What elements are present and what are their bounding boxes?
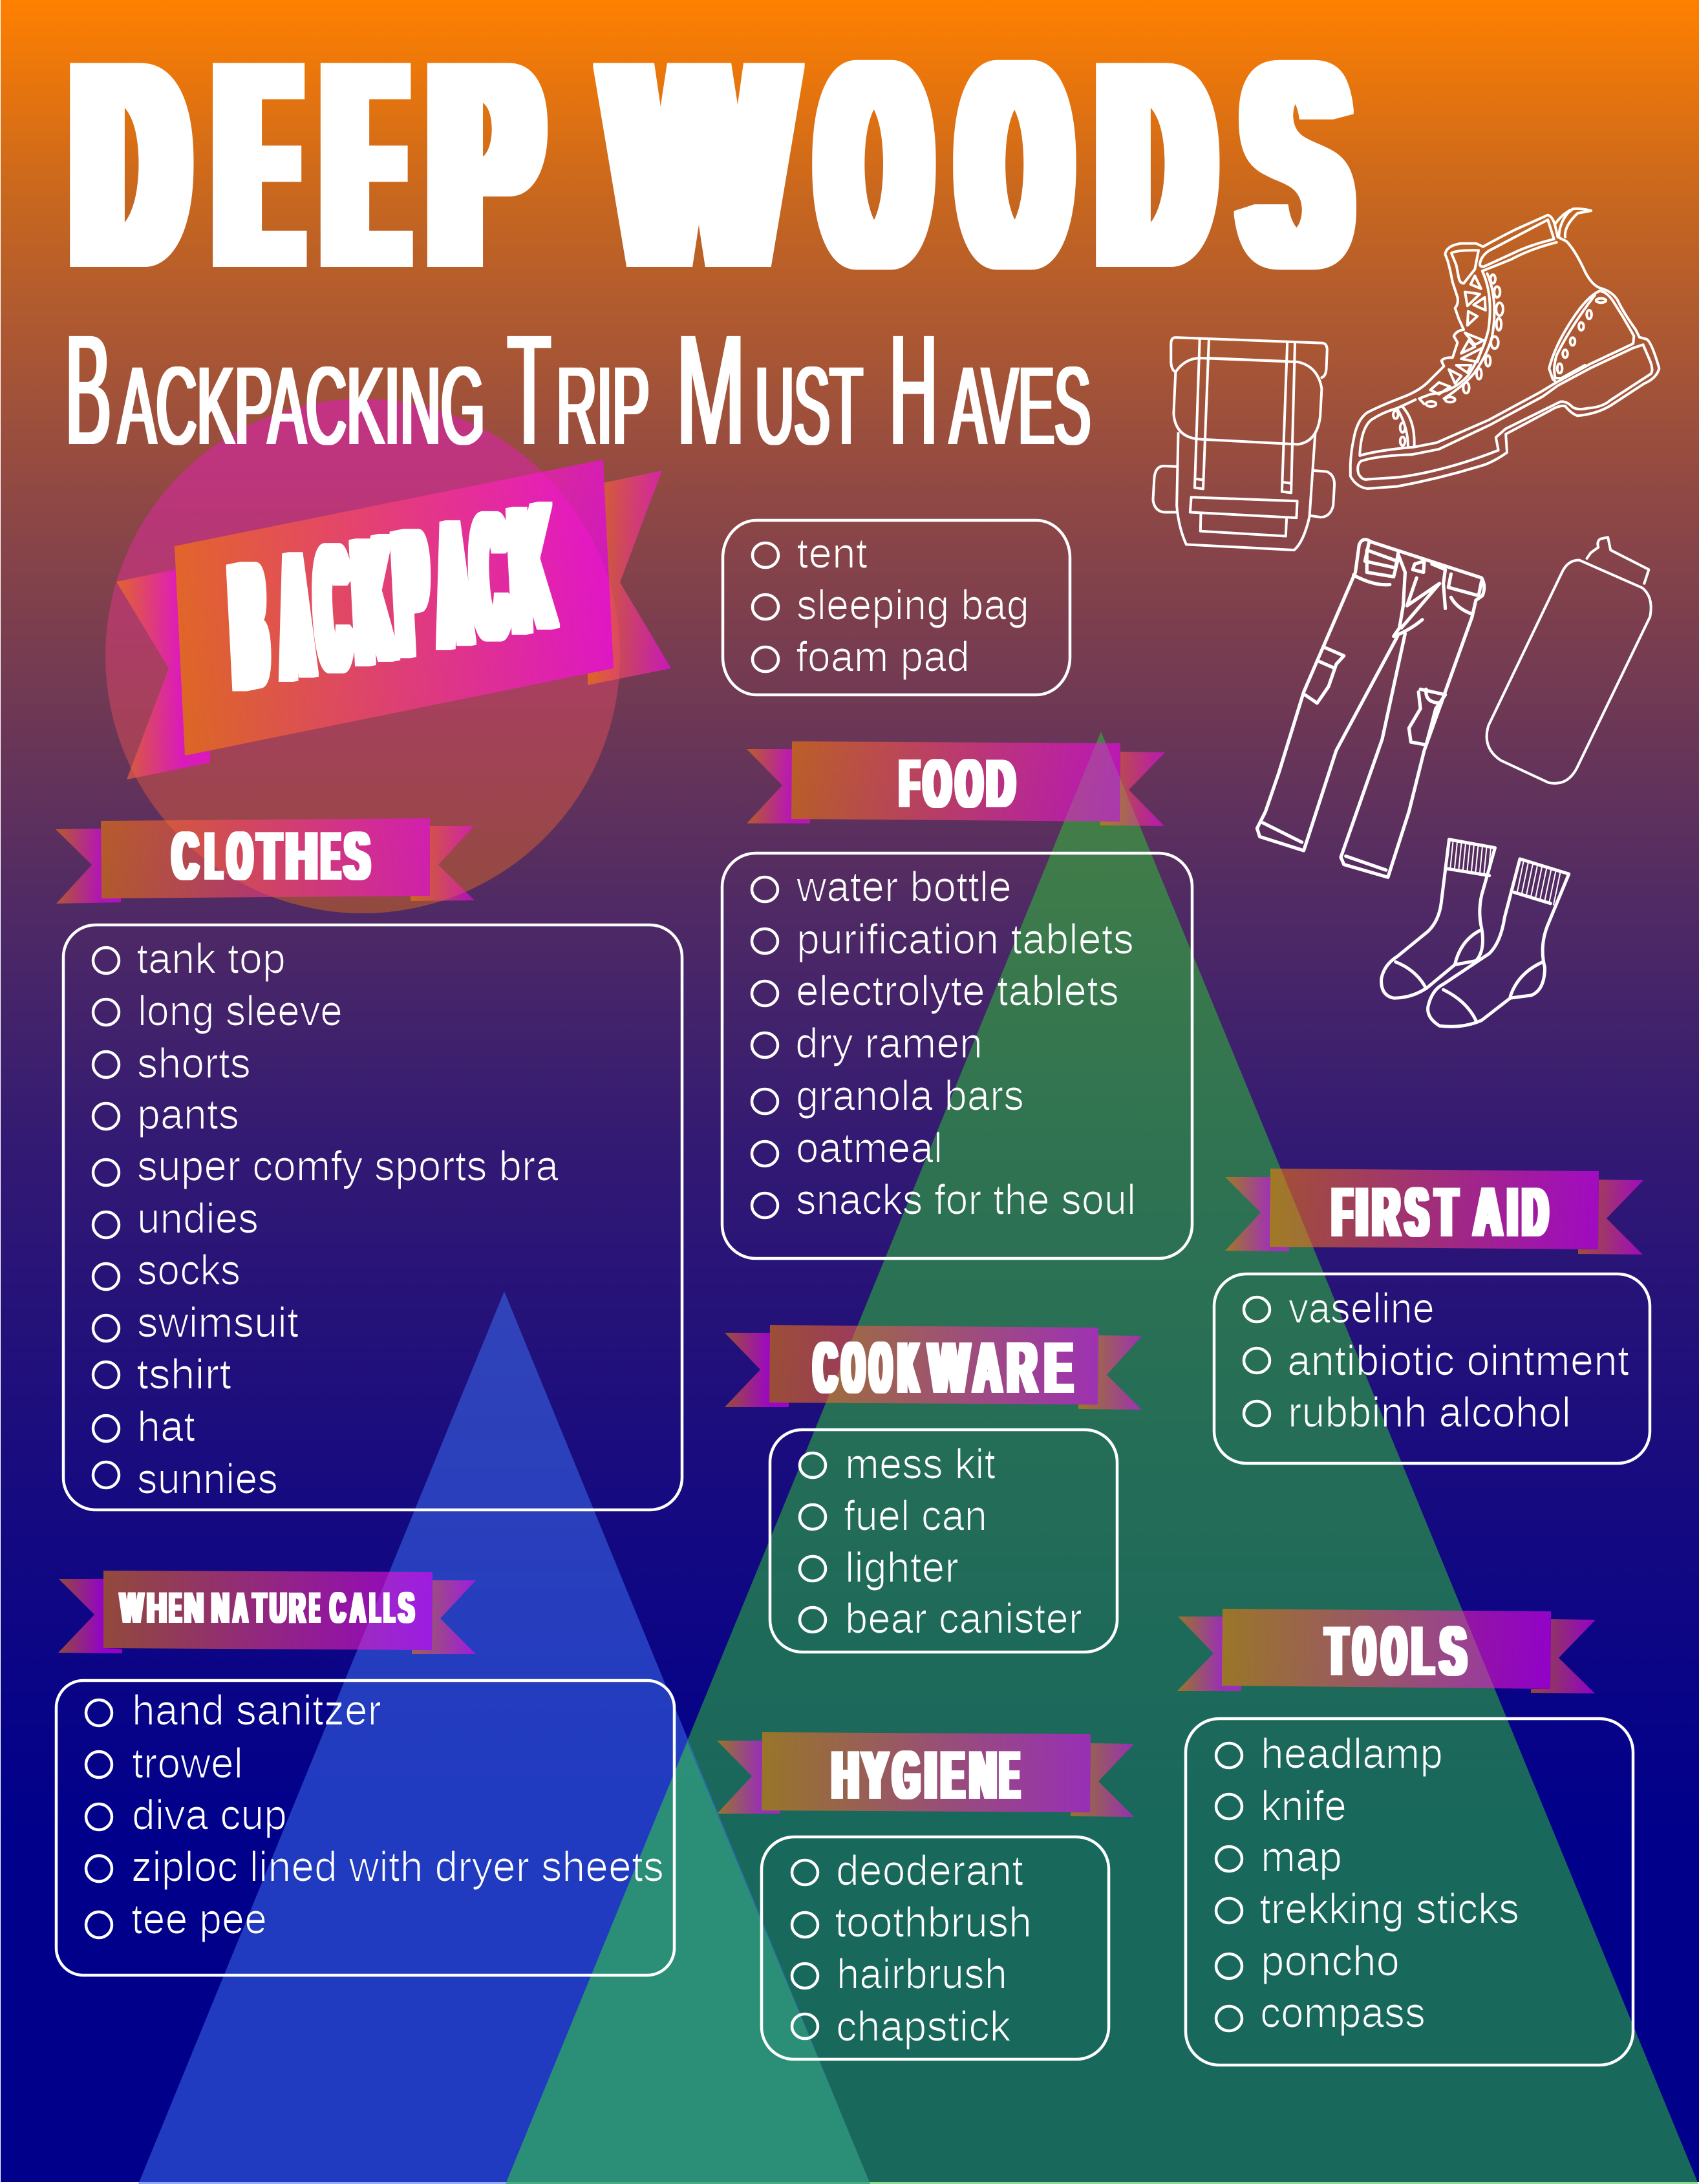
bullets	[800, 1453, 826, 1632]
ribbon: backpack	[116, 460, 671, 779]
ribbon label: backpack: A	[277, 513, 315, 718]
items: electrolyte tablets	[796, 968, 1119, 1014]
list box	[722, 853, 1192, 1258]
ribbon: clothes: T	[258, 819, 281, 894]
ribbon: clothes: E	[322, 819, 339, 894]
bullets	[1244, 1297, 1270, 1426]
subtitle: M	[676, 302, 745, 478]
ribbon: cookware: C	[814, 1328, 837, 1408]
items: toothbrush	[835, 1899, 1032, 1945]
items: oatmeal	[796, 1125, 943, 1171]
ribbon: food: D	[987, 747, 1015, 822]
items: pants	[137, 1091, 239, 1138]
main title: E	[222, 3, 294, 327]
ribbon: cookware: O	[870, 1328, 892, 1408]
ribbon: when nature calls: H	[147, 1584, 167, 1631]
items: trowel	[132, 1740, 243, 1786]
ribbon: food: O	[924, 747, 951, 822]
ribbon: when nature calls: W	[120, 1584, 144, 1631]
ribbon: when nature calls: A	[350, 1584, 365, 1631]
ribbon: first aid	[1225, 1169, 1643, 1255]
ribbon: clothes: C	[173, 819, 198, 894]
ribbon: clothes: S	[345, 819, 370, 894]
items: deoderant	[836, 1847, 1023, 1894]
items: chapstick	[836, 2003, 1011, 2050]
ribbon label: backpack	[228, 465, 555, 728]
items: sleeping bag	[796, 582, 1029, 628]
subtitle	[65, 302, 1091, 478]
green triangle	[506, 732, 1698, 2184]
items: tent	[796, 530, 868, 577]
ribbon: tools: L	[1412, 1612, 1433, 1690]
ribbon: clothes: O	[228, 819, 252, 894]
ribbon: when nature calls: E	[310, 1584, 319, 1631]
ribbon: tools	[1177, 1609, 1596, 1693]
list box	[63, 925, 682, 1510]
ribbon: tools: S	[1440, 1612, 1466, 1690]
subtitle: T	[508, 302, 551, 478]
list box	[723, 520, 1070, 695]
items: diva cup	[132, 1792, 287, 1838]
items: granola bars	[796, 1072, 1024, 1119]
items: rubbinh alcohol	[1288, 1389, 1571, 1436]
ribbon: when nature calls: C	[330, 1584, 345, 1631]
items: ziploc lined with dryer sheets	[131, 1843, 664, 1890]
ribbon: food: O	[956, 747, 982, 822]
subtitle: B	[65, 302, 111, 478]
items: headlamp	[1261, 1730, 1443, 1777]
items: knife	[1261, 1783, 1347, 1829]
panel: when nature calls	[56, 1571, 674, 1975]
ribbon: first aid: T	[1436, 1173, 1457, 1251]
items: poncho	[1261, 1938, 1400, 1984]
items	[835, 1847, 1032, 2050]
panel: food	[722, 741, 1192, 1258]
items: trekking sticks	[1259, 1885, 1519, 1932]
items: lighter	[845, 1544, 959, 1591]
items: fuel can	[844, 1492, 987, 1539]
ribbon label: backpack: K	[350, 496, 396, 703]
main title: W	[610, 3, 790, 327]
items: socks	[137, 1247, 240, 1293]
ribbon: cookware	[725, 1325, 1142, 1410]
ribbon: when nature calls: N	[184, 1584, 204, 1631]
panel: cookware	[725, 1325, 1142, 1652]
list box	[770, 1430, 1117, 1652]
main title: O	[965, 3, 1065, 327]
icon: backpack	[1153, 337, 1334, 550]
bullets	[792, 1860, 818, 2039]
ribbon: when nature calls	[58, 1571, 476, 1654]
ribbon: food: F	[900, 747, 919, 822]
main title: E	[330, 3, 400, 327]
items	[796, 530, 1029, 680]
bullets	[1216, 1743, 1242, 2031]
ribbon label: backpack: P	[392, 489, 431, 695]
ribbon: hygiene: N	[970, 1738, 996, 1813]
ribbon: cookware: W	[929, 1328, 969, 1408]
items: mess kit	[845, 1441, 996, 1487]
ribbon: clothes: H	[286, 819, 317, 894]
main title: D	[77, 3, 183, 327]
ribbon: hygiene: E	[1000, 1738, 1019, 1813]
icon: boot	[1351, 209, 1659, 489]
icon: socks	[1382, 840, 1569, 1026]
subtitle: ACKPACKING	[118, 344, 485, 468]
items	[795, 864, 1136, 1223]
ribbon: first aid: R	[1373, 1173, 1400, 1251]
items: swimsuit	[137, 1299, 299, 1346]
items: foam pad	[796, 633, 970, 680]
panel: tools	[1177, 1609, 1633, 2065]
ribbon: cookware: A	[974, 1328, 1001, 1408]
ribbon: first aid: D	[1523, 1173, 1548, 1251]
items: snacks for the soul	[796, 1176, 1136, 1223]
subtitle: UST	[755, 344, 862, 468]
subtitle: RIP	[557, 344, 648, 468]
items: hairbrush	[837, 1951, 1007, 1997]
ribbon: clothes	[56, 818, 475, 904]
subtitle: H	[890, 302, 937, 478]
items: undies	[137, 1195, 259, 1242]
ribbon: tools: T	[1326, 1612, 1347, 1690]
ribbon: when nature calls: S	[399, 1584, 414, 1631]
ribbon: tools: O	[1354, 1612, 1375, 1690]
list box	[762, 1837, 1109, 2059]
ribbon label: backpack: B	[228, 522, 270, 728]
ribbon: when nature calls: A	[233, 1584, 248, 1631]
bullets	[86, 1700, 112, 1938]
panel: first aid	[1214, 1169, 1650, 1463]
ribbon: hygiene: G	[893, 1738, 919, 1813]
items: hand sanitzer	[132, 1687, 381, 1733]
main title: D	[1103, 3, 1209, 327]
ribbon: hygiene: H	[832, 1738, 859, 1813]
ribbon label: backpack: C	[469, 473, 512, 679]
items	[1287, 1285, 1629, 1436]
ribbon: when nature calls: L	[370, 1584, 380, 1631]
ribbon label: backpack: A	[434, 481, 473, 686]
ribbon: first aid: I	[1508, 1173, 1517, 1251]
ribbon: when nature calls: T	[253, 1584, 266, 1631]
items: antibiotic ointment	[1287, 1337, 1629, 1384]
ribbon: first aid: A	[1474, 1173, 1502, 1251]
main title: O	[824, 3, 924, 327]
list box	[1214, 1274, 1650, 1463]
text: AVES	[950, 344, 1091, 468]
ribbon: when nature calls: E	[169, 1584, 181, 1631]
items: vaseline	[1288, 1285, 1435, 1331]
green triangle overlap	[506, 1742, 870, 2184]
items	[136, 935, 559, 1502]
ribbon: clothes: L	[206, 819, 221, 894]
ribbon: first aid: F	[1332, 1173, 1352, 1251]
items: tank top	[136, 935, 286, 982]
bullets	[753, 543, 778, 672]
ribbon: cookware: K	[899, 1328, 918, 1408]
ribbon: when nature calls: N	[211, 1584, 229, 1631]
bullets	[93, 948, 119, 1488]
items: long sleeve	[138, 988, 343, 1034]
items: map	[1261, 1834, 1342, 1880]
ribbon: cookware: R	[1007, 1328, 1037, 1408]
blue triangle	[138, 1291, 870, 2184]
ribbon: when nature calls: L	[384, 1584, 394, 1631]
ribbon: hygiene	[717, 1732, 1134, 1817]
panel: hygiene	[717, 1732, 1134, 2059]
ribbon: first aid: I	[1356, 1173, 1368, 1251]
ribbon: hygiene: I	[924, 1738, 937, 1813]
icon: pants	[1257, 540, 1484, 877]
ribbon: cookware: O	[842, 1328, 864, 1408]
icon: water bottle	[1487, 537, 1651, 783]
items: super comfy sports bra	[137, 1143, 559, 1189]
bullets	[752, 877, 778, 1218]
items: hat	[137, 1403, 195, 1450]
main title	[77, 3, 1345, 327]
list box	[1186, 1719, 1633, 2065]
list box	[56, 1680, 674, 1975]
panel: bedding list	[723, 520, 1070, 695]
items: purification tablets	[796, 916, 1134, 962]
items	[131, 1687, 664, 1942]
ribbon: cookware: E	[1045, 1328, 1073, 1408]
ribbon: tools: O	[1382, 1612, 1406, 1690]
panel: clothes	[56, 818, 682, 1510]
items: tshirt	[136, 1351, 231, 1397]
items	[844, 1441, 1082, 1642]
ribbon: backpack: K	[507, 465, 555, 672]
pink circle behind backpack ribbon	[105, 399, 620, 913]
ribbon: first aid: S	[1405, 1173, 1428, 1251]
items: bear canister	[845, 1595, 1082, 1642]
items: tee pee	[131, 1896, 267, 1942]
main title: S	[1246, 3, 1345, 327]
items: sunnies	[137, 1456, 278, 1502]
ribbon: food	[747, 741, 1165, 826]
ribbon: when nature calls: U	[270, 1584, 286, 1631]
ribbon: when nature calls: R	[290, 1584, 305, 1631]
items: water bottle	[796, 864, 1012, 910]
ribbon: hygiene: E	[941, 1738, 964, 1813]
ribbon label: backpack: C	[313, 505, 353, 711]
items	[1259, 1730, 1519, 2036]
items: shorts	[137, 1040, 251, 1087]
items: compass	[1260, 1989, 1426, 2036]
main title: P	[434, 3, 533, 327]
items: dry ramen	[795, 1020, 983, 1066]
ribbon: hygiene: Y	[862, 1738, 888, 1813]
